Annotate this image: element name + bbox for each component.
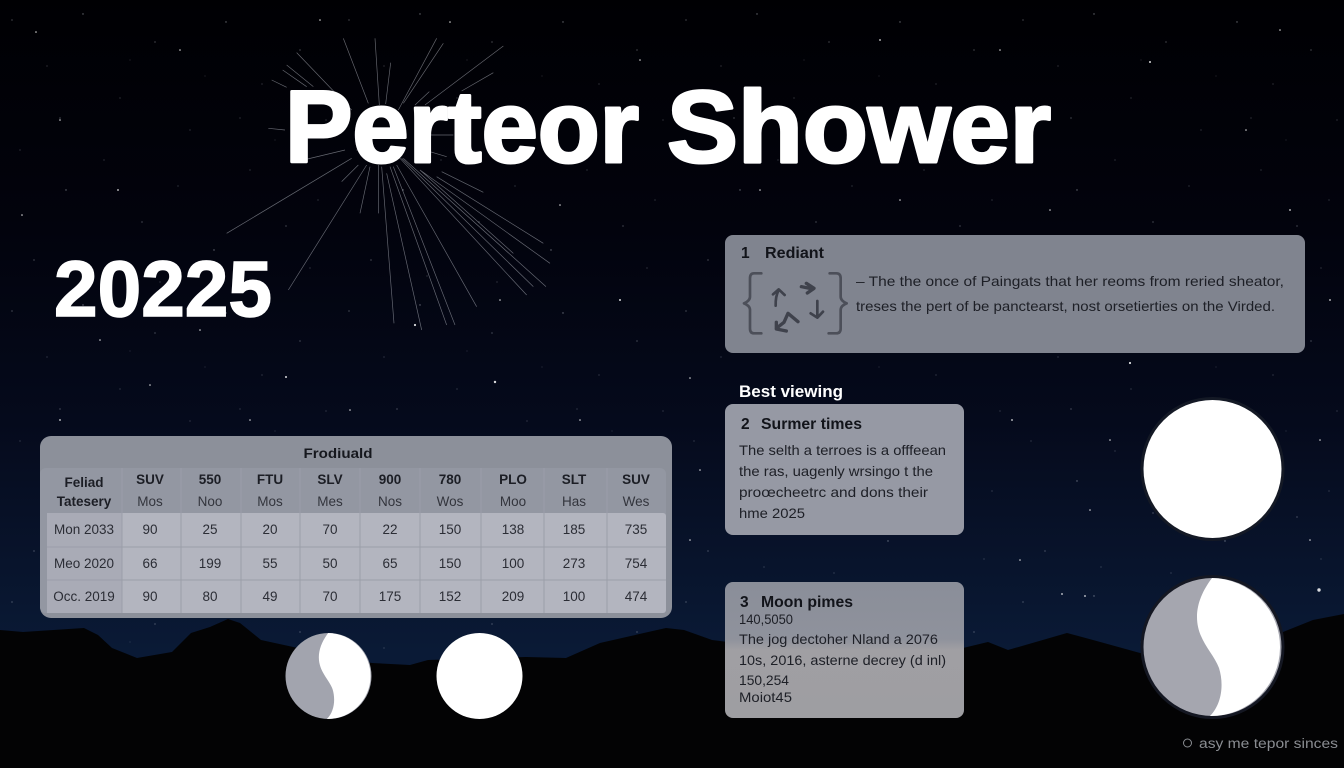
moon: full large — [1144, 400, 1282, 538]
moon times description: Moiot45 — [739, 689, 792, 705]
table header row: Noo — [198, 494, 222, 509]
radiant heading — [741, 245, 824, 262]
table row: Mon 2033: 90 — [142, 522, 158, 537]
moon phase: full — [436, 633, 522, 719]
summer times heading: 2 — [741, 416, 750, 433]
table row: Mon 2033: 138 — [502, 522, 524, 537]
table row: Meo 2020: 100 — [502, 556, 524, 571]
title — [285, 70, 1051, 184]
radiant description: – The the once of Paingats that her reoms from reried sheator, — [856, 273, 1284, 289]
panel: summer times — [725, 404, 964, 535]
summer times description — [739, 442, 946, 521]
moon times description: 150,254 — [739, 672, 789, 688]
heading: best viewing: Best viewing — [739, 383, 843, 401]
summer times description: The selth a terroes is a offfeean — [739, 442, 946, 458]
table row: Mon 2033: 22 — [382, 522, 398, 537]
table header row: PLO — [499, 472, 527, 487]
radiant heading: Rediant — [765, 245, 824, 262]
table row: Mon 2033: 185 — [563, 522, 585, 537]
table header row: SLT — [562, 472, 587, 487]
table row: Occ. 2019: 474 — [625, 589, 648, 604]
table header row: Wes — [623, 494, 650, 509]
radiant description — [856, 273, 1284, 314]
table row: Mon 2033: 25 — [202, 522, 218, 537]
table header row: Feliad — [64, 475, 104, 490]
table row: Mon 2033: Mon 2033 — [54, 522, 114, 537]
panel: data table — [40, 436, 672, 618]
table row: Occ. 2019: 209 — [502, 589, 524, 604]
radiant heading: 1 — [741, 245, 750, 262]
table header row: Has — [562, 494, 586, 509]
icon: radiant arrows in braces — [744, 273, 847, 333]
table row: Meo 2020: 754 — [625, 556, 648, 571]
moon times description — [739, 611, 946, 705]
table row: Meo 2020: 150 — [439, 556, 461, 571]
table header row: SUV — [136, 472, 164, 487]
panel: moon times — [725, 582, 964, 718]
table header row: Tatesery — [57, 494, 112, 509]
table header row: Mos — [257, 494, 283, 509]
title: Perteor — [285, 70, 639, 184]
radiant description: treses the pert of be panctearst, nost orsetierties on the Virded. — [856, 298, 1275, 314]
footer note: asy me tepor sinces — [1199, 736, 1338, 751]
summer times description: the ras, uagenly wrsingo t the — [739, 463, 933, 479]
panel: radiant — [725, 235, 1305, 353]
table row: Mon 2033: 70 — [322, 522, 338, 537]
table row: Meo 2020: 199 — [199, 556, 221, 571]
table row: Meo 2020 — [54, 556, 648, 571]
moon times description: 140,5050 — [739, 611, 793, 627]
table row: Meo 2020: 65 — [382, 556, 398, 571]
table row: Occ. 2019 — [53, 589, 648, 604]
table row: Meo 2020: 273 — [563, 556, 585, 571]
summer times description: hme 2025 — [739, 505, 805, 521]
table row: Occ. 2019: 49 — [262, 589, 278, 604]
table header row: Mos — [137, 494, 163, 509]
moon times heading: Moon pimes — [761, 594, 853, 611]
table title: Frodiuald — [304, 445, 372, 461]
table header row — [57, 472, 650, 509]
table row: Occ. 2019: Occ. 2019 — [53, 589, 115, 604]
table row: Meo 2020: 50 — [322, 556, 338, 571]
summer times description: proœcheetrc and dons their — [739, 484, 928, 500]
table row: Mon 2033: 20 — [262, 522, 278, 537]
table header row: SLV — [317, 472, 343, 487]
table header row: Moo — [500, 494, 526, 509]
table header row: 900 — [379, 472, 401, 487]
table header row: 550 — [199, 472, 221, 487]
table header row: Mes — [317, 494, 343, 509]
moon: waning large — [1144, 578, 1282, 716]
moon phase: waning — [286, 633, 372, 719]
table row: Mon 2033: 735 — [625, 522, 647, 537]
table header row: 780 — [439, 472, 461, 487]
table header row: FTU — [257, 472, 283, 487]
moon times description: 10s, 2016, asterne decrey (d inl) — [739, 652, 946, 668]
table row: Occ. 2019: 70 — [322, 589, 338, 604]
moon times description: The jog dectoher Nland a 2076 — [739, 631, 938, 647]
table row: Mon 2033: 150 — [439, 522, 461, 537]
summer times heading: Surmer times — [761, 416, 862, 433]
moon times heading: 3 — [740, 594, 749, 611]
table row: Mon 2033 — [54, 522, 647, 537]
title: Shower — [667, 70, 1051, 184]
table row: Occ. 2019: 100 — [563, 589, 585, 604]
table row: Occ. 2019: 90 — [142, 589, 158, 604]
radiant meteor streaks — [227, 38, 550, 330]
table row: Occ. 2019: 152 — [439, 589, 461, 604]
mountain silhouette — [0, 614, 1344, 768]
table row: Meo 2020: 55 — [262, 556, 278, 571]
table header row: SUV — [622, 472, 650, 487]
table header row: Wos — [437, 494, 464, 509]
table header row: Nos — [378, 494, 402, 509]
table row: Occ. 2019: 80 — [202, 589, 218, 604]
table row: Occ. 2019: 175 — [379, 589, 401, 604]
table row: Meo 2020: Meo 2020 — [54, 556, 114, 571]
table row: Meo 2020: 66 — [142, 556, 158, 571]
year: 20225 — [54, 244, 272, 333]
